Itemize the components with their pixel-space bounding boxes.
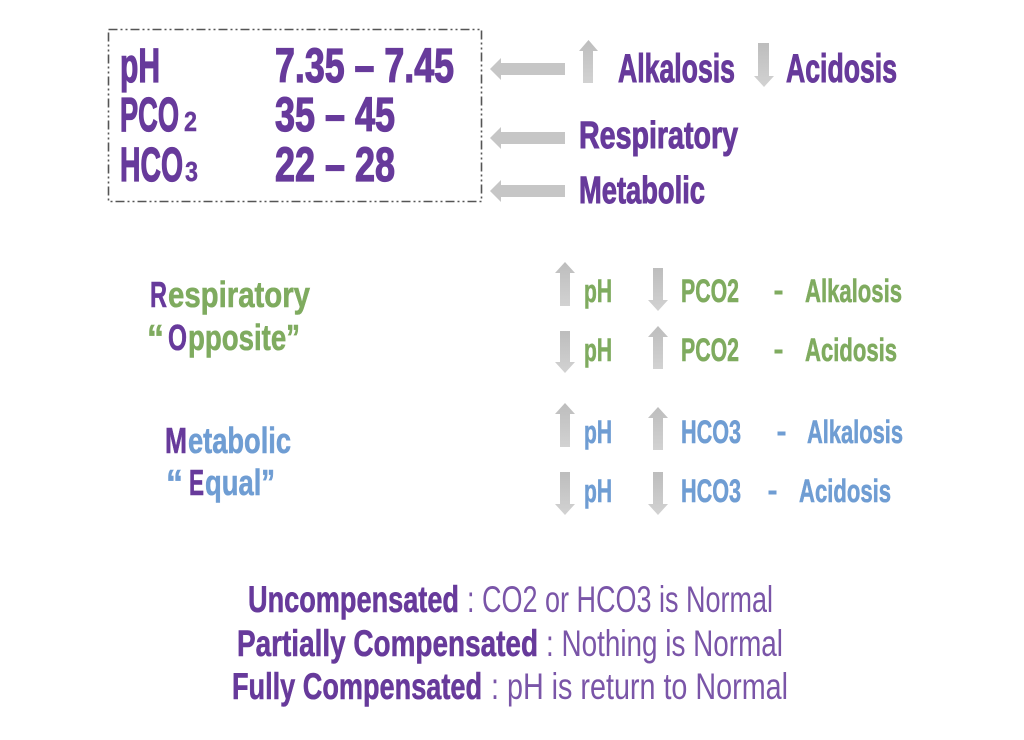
definition: partially compensated: : Nothing is Normal [546,623,783,664]
mnemonic: metabolic equal: “ [166,462,183,503]
row: PCO2 [120,89,395,142]
panel: normal ranges [108,30,482,202]
icon: down arrow acidosis [754,43,774,87]
row: respiratory alkalosis [555,262,902,311]
label: respiratory: Respiratory [579,115,738,157]
row: respiratory acidosis: Acidosis [805,332,897,368]
mnemonic: respiratory opposite: pposite” [188,317,300,358]
label: metabolic: Metabolic [579,170,705,212]
mnemonic: metabolic equal: qual” [205,462,275,503]
mnemonic: respiratory opposite: O [168,317,187,358]
dashed box [108,30,482,202]
row: metabolic acidosis [555,472,891,515]
mnemonic: respiratory opposite: espiratory [168,274,310,315]
row: pH: 7.35 – 7.45 [275,40,454,93]
arrow: to HCO3 [490,180,565,202]
row: metabolic acidosis: HCO3 [681,473,741,509]
mnemonic: metabolic equal [165,420,291,503]
mnemonic: metabolic equal: E [189,462,204,503]
row: respiratory alkalosis: Alkalosis [805,273,902,309]
row: PCO2: 2 [184,106,197,137]
row: HCO3: 3 [185,156,198,187]
row: respiratory acidosis: pH [584,332,612,368]
row: metabolic alkalosis: HCO3 [681,414,741,450]
definition: partially compensated: Partially Compensated [237,623,538,664]
label: acidosis: Acidosis [786,47,897,91]
row: PCO2: 35 – 45 [275,89,395,142]
row: HCO3 [120,139,395,192]
row: metabolic alkalosis: pH [584,414,612,450]
row: metabolic acidosis: Acidosis [799,473,891,509]
definition: fully compensated: : pH is return to Normal [491,666,788,707]
mnemonic: respiratory opposite: R [150,274,167,315]
label: alkalosis: Alkalosis [618,47,735,91]
mnemonic: metabolic equal: etabolic [188,420,291,461]
definition: uncompensated [248,579,773,620]
row: metabolic alkalosis [555,403,903,450]
row: respiratory alkalosis: PCO2 [681,273,739,309]
row: HCO3: 22 – 28 [275,139,395,192]
row: pH [120,40,454,93]
definition: uncompensated: Uncompensated [248,579,459,620]
row: metabolic alkalosis: Alkalosis [807,414,903,450]
mnemonic: respiratory opposite [147,274,310,358]
row: metabolic acidosis: pH [584,473,612,509]
definition: fully compensated: Fully Compensated [232,666,482,707]
row: PCO2: PCO [120,89,179,142]
definition: uncompensated: : CO2 or HCO3 is Normal [467,579,773,620]
icon: up arrow alkalosis [579,40,598,83]
mnemonic: metabolic equal: M [165,420,187,461]
row: respiratory alkalosis: pH [584,273,612,309]
row: respiratory acidosis: PCO2 [681,332,739,368]
mnemonic: respiratory opposite: “ [147,317,164,358]
arrow: to PCO2 [490,127,565,149]
row: pH: pH [120,40,160,93]
arrow: to pH [490,58,565,80]
definition: fully compensated [232,666,788,707]
row: respiratory acidosis [555,326,897,373]
row: HCO3: HCO [120,139,183,192]
